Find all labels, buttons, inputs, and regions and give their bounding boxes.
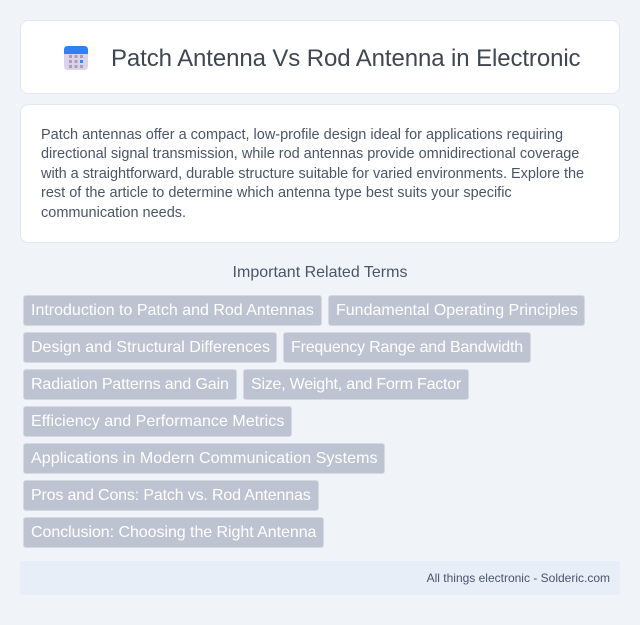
title: Patch Antenna Vs Rod Antenna in Electronic [111, 45, 580, 72]
panel: title card [20, 20, 620, 94]
icon: calendar [64, 46, 88, 70]
tag list: Efficiency and Performance Metrics [31, 413, 284, 430]
tag list: Size, Weight, and Form Factor [251, 376, 461, 393]
panel: summary card [20, 104, 620, 243]
tag list [23, 295, 585, 548]
summary text: communication needs. [41, 205, 186, 221]
summary text: with a straightforward, durable structure suitable for varied environments. Explore the [41, 166, 584, 182]
tag list: Introduction to Patch and Rod Antennas [31, 302, 314, 319]
summary text [41, 127, 584, 221]
footer: All things electronic - Solderic.com [427, 571, 610, 585]
tag list: Pros and Cons: Patch vs. Rod Antennas [31, 487, 311, 504]
summary text: rest of the article to determine which antenna type best suits your specific [41, 185, 512, 201]
summary text: directional signal transmission, while rod antennas provide omnidirectional coverage [41, 146, 579, 162]
tag list: Radiation Patterns and Gain [31, 376, 229, 393]
tag list: Fundamental Operating Principles [336, 302, 578, 319]
tag list: Applications in Modern Communication Systems [31, 450, 378, 467]
footer [20, 561, 620, 595]
tag list: Design and Structural Differences [31, 339, 270, 356]
summary text: Patch antennas offer a compact, low-profile design ideal for applications requiring [41, 127, 563, 143]
heading: important related terms: Important Related Terms [233, 264, 407, 281]
tag list: Conclusion: Choosing the Right Antenna [31, 524, 316, 541]
tag list: Frequency Range and Bandwidth [291, 339, 523, 356]
